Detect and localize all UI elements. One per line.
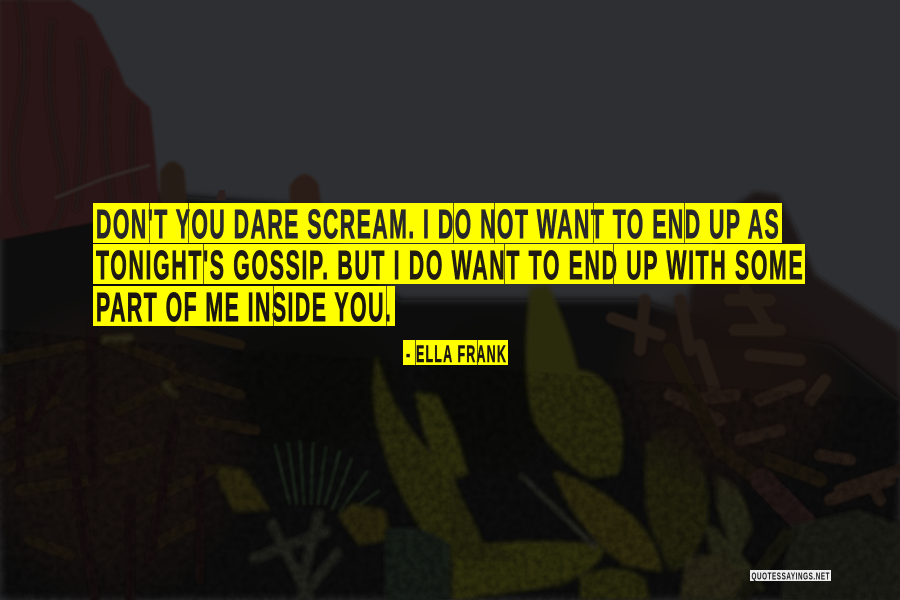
photo grain xyxy=(0,320,900,600)
prickly pear pads xyxy=(373,285,765,600)
quote line 3: PART OF ME INSIDE YOU. xyxy=(96,283,391,330)
grass xyxy=(275,440,380,515)
spires xyxy=(160,161,187,205)
attribution: - ELLA FRANK xyxy=(406,342,506,368)
distant mountain xyxy=(690,192,900,460)
left cholla cactus xyxy=(0,290,260,600)
small yellow pads and pale ground plants xyxy=(215,465,392,600)
watermark: QUOTESSAYINGS.NET xyxy=(752,570,830,582)
right cholla cactus xyxy=(605,275,855,495)
boulder lower right xyxy=(780,510,900,600)
ground mass xyxy=(0,195,900,600)
dark centre vegetation xyxy=(215,310,405,460)
quote line 1: DON'T YOU DARE SCREAM. I DO NOT WANT TO END UP AS xyxy=(96,200,779,247)
cliff rock texture xyxy=(14,0,136,230)
left cliff xyxy=(0,0,160,240)
quote line 2: TONIGHT'S GOSSIP. BUT I DO WANT TO END UP WITH SOME xyxy=(96,241,803,288)
